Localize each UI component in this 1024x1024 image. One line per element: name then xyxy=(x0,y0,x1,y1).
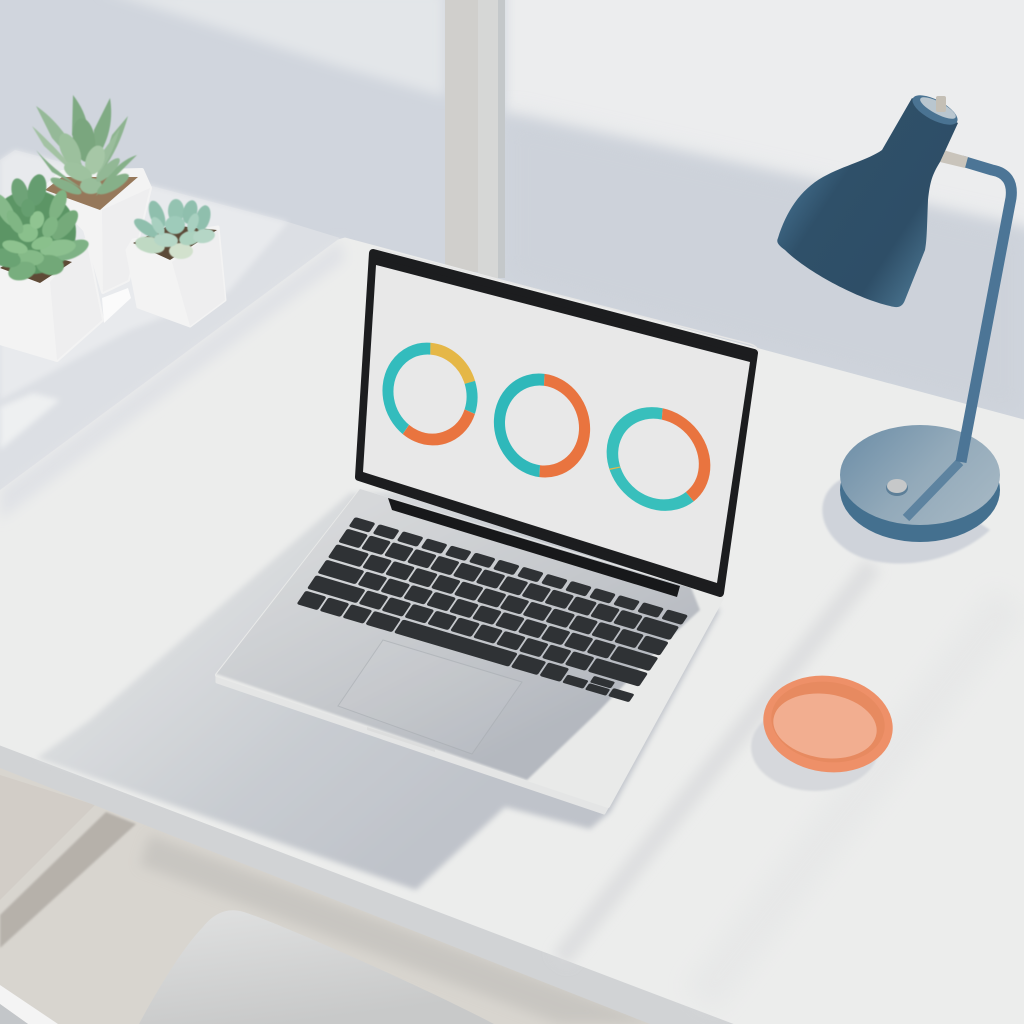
right pot with pale succulent xyxy=(127,199,225,326)
coaster xyxy=(751,667,899,791)
screen lid xyxy=(359,253,754,593)
donut chart 3 xyxy=(567,368,750,550)
front left pot with green succulent xyxy=(0,172,102,360)
lamp stem xyxy=(961,161,1011,462)
hinge xyxy=(388,498,680,597)
keyboard xyxy=(296,517,688,703)
trackpad xyxy=(338,640,522,754)
floor xyxy=(0,760,680,1024)
lamp base shadow xyxy=(822,470,990,564)
laptop xyxy=(205,248,759,813)
laptop base xyxy=(205,480,722,813)
screen xyxy=(363,265,750,583)
donut chart 2 xyxy=(468,348,616,503)
desk lamp xyxy=(777,89,1011,564)
lid top highlight xyxy=(376,248,759,352)
desk light and shadow patches xyxy=(0,240,1010,1000)
lamp connector xyxy=(940,150,968,168)
lamp shade xyxy=(777,89,962,307)
window column xyxy=(445,0,505,278)
donut chart 1 xyxy=(353,313,507,475)
plants xyxy=(0,95,225,360)
lamp base xyxy=(840,425,1000,542)
back pot with spiky succulent xyxy=(32,95,150,323)
side shelf xyxy=(0,150,340,490)
chair back xyxy=(139,910,494,1024)
desk xyxy=(0,238,1024,1024)
